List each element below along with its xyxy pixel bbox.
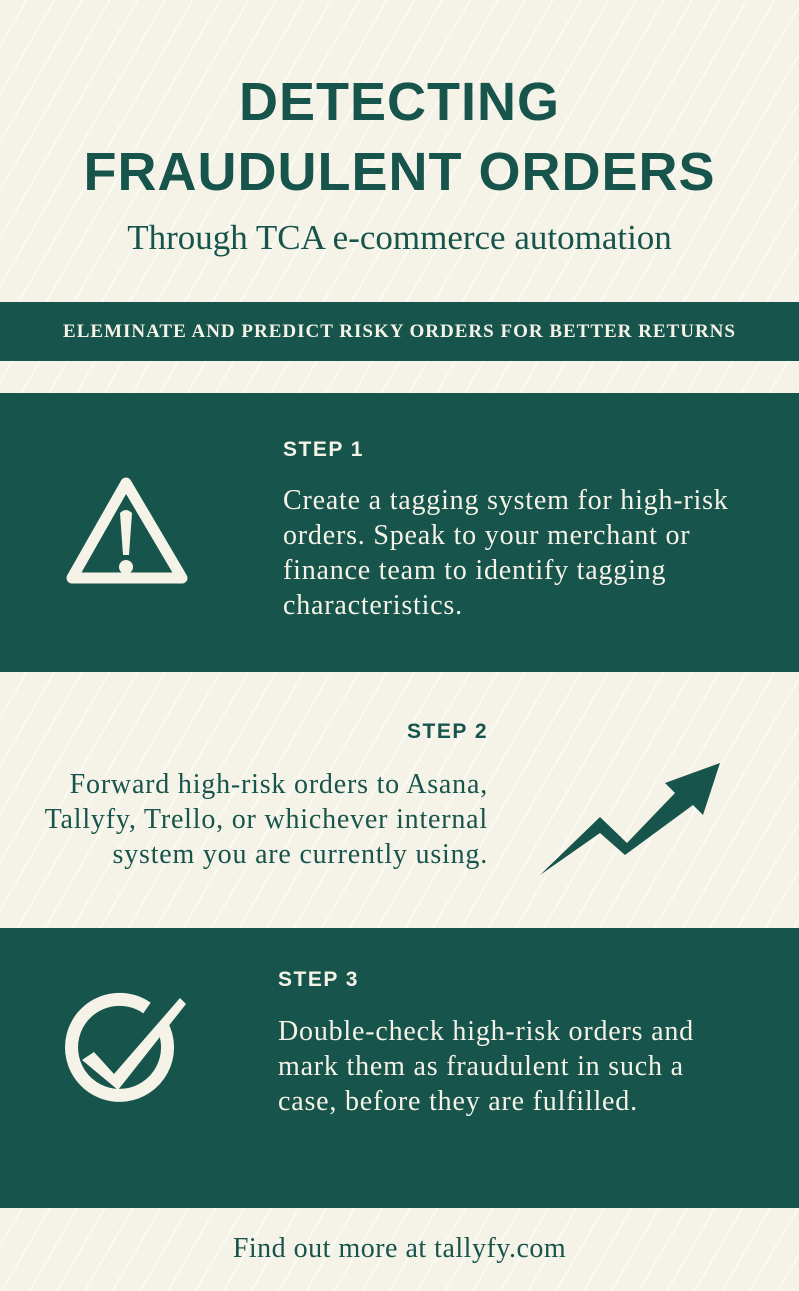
icon: warning triangle [66,478,188,584]
step 2 heading: STEP 2 [407,720,488,743]
title [84,72,716,202]
step 3 text [278,1016,694,1117]
banner [0,302,799,361]
step 1 text: Create a tagging system for high-risk [283,485,729,516]
icon: rising arrow [540,763,720,875]
step 3 heading: STEP 3 [278,968,359,991]
banner: ELEMINATE AND PREDICT RISKY ORDERS FOR BETTER RETURNS [63,321,736,342]
step 2 text: Tallyfy, Trello, or whichever internal [45,804,488,835]
step 2 text [45,769,488,870]
step 2 text: Forward high-risk orders to Asana, [70,769,488,800]
step 1 text [283,485,729,621]
step 1 text: characteristics. [283,590,463,621]
step 3 text: case, before they are fulfilled. [278,1086,638,1117]
footer: Find out more at tallyfy.com [233,1233,566,1264]
panel: step 3 [0,928,799,1208]
step 3 text: Double-check high-risk orders and [278,1016,694,1047]
panel: step 1 [0,393,799,672]
title: FRAUDULENT ORDERS [84,142,716,202]
step 3 text: mark them as fraudulent in such a [278,1051,684,1082]
step 1 text: finance team to identify tagging [283,555,666,586]
step 1 heading: STEP 1 [283,438,364,461]
subtitle: Through TCA e-commerce automation [127,218,672,257]
title: DETECTING [239,72,560,132]
step 2 text: system you are currently using. [112,839,488,870]
icon: check circle [65,992,186,1102]
step 1 text: orders. Speak to your merchant or [283,520,690,551]
